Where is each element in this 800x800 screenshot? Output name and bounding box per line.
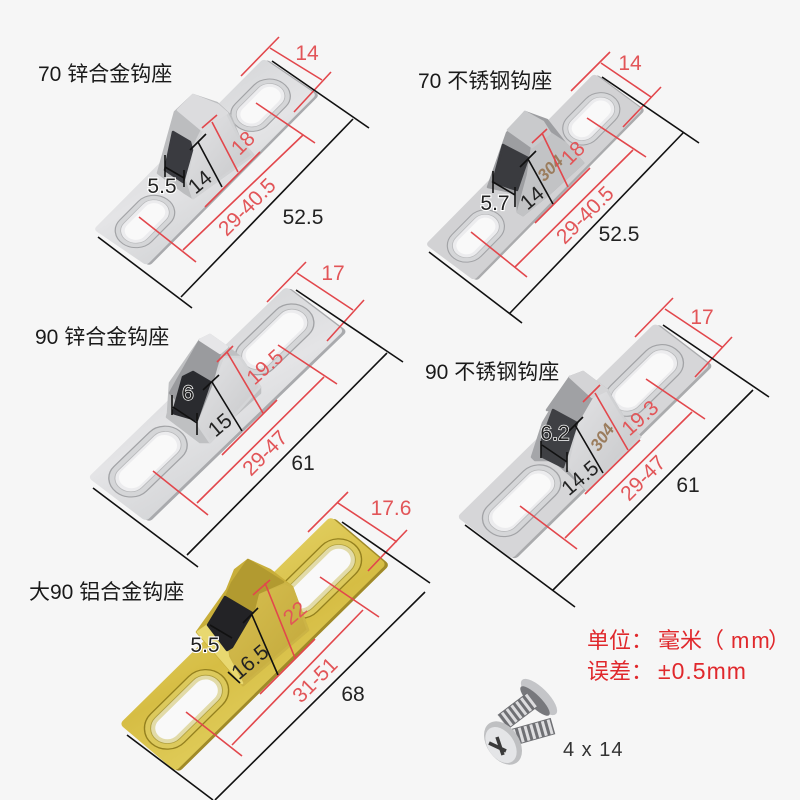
unit note: ） xyxy=(768,628,790,653)
panel: large 90 aluminium alloy hook seat xyxy=(29,492,430,800)
dimension: depth 14 xyxy=(184,134,222,199)
unit note: 单位： xyxy=(587,628,653,653)
dimension: gap 6 xyxy=(172,382,197,435)
dimension: hole spacing 29-47 xyxy=(153,345,337,515)
metal plate xyxy=(457,322,713,561)
dimension: gap 5.5: 5.5 xyxy=(190,634,220,657)
dimension: width 14 xyxy=(241,37,331,112)
dimension: gap 5.5 xyxy=(147,155,184,198)
screw size label: 4 x 14 xyxy=(563,739,623,761)
gold plate xyxy=(120,515,390,773)
dimension: length 52.5 xyxy=(429,77,699,323)
title: large 90 aluminium: 大90 铝合金钩座 xyxy=(29,581,184,604)
unit note xyxy=(587,628,790,684)
dimension: gap 6.2 xyxy=(540,422,570,472)
dimension: height 19.3 xyxy=(583,385,663,494)
hook block xyxy=(532,372,640,490)
dimension: length 61 xyxy=(93,290,403,567)
dimension: height 18: 18 xyxy=(557,137,590,170)
dimension: width 17: 17 xyxy=(690,306,714,329)
dimension: depth 15 xyxy=(203,375,242,442)
hook block xyxy=(197,560,308,685)
dimension: gap 6: 6 xyxy=(182,382,194,405)
dimension: depth 16.5: 16.5 xyxy=(227,640,273,684)
dimension: depth 16.5 xyxy=(227,608,278,684)
dimension: length 61: 61 xyxy=(291,452,315,475)
unit note: mm xyxy=(731,628,772,653)
dimension: height 22: 22 xyxy=(279,597,312,630)
dimension: hole spacing 31-51: 31-51 xyxy=(288,653,342,707)
dimension: width 17 xyxy=(267,262,364,341)
icon: screws xyxy=(476,674,562,772)
dimension: hole spacing 29-40.5: 29-40.5 xyxy=(552,182,619,249)
dimension: depth 14: 14 xyxy=(516,182,549,215)
hook block xyxy=(488,112,583,215)
dimension: length 52.5 xyxy=(98,61,369,308)
dimension: length 68 xyxy=(127,522,430,800)
metal plate xyxy=(426,73,645,282)
dimension: height 18: 18 xyxy=(227,127,260,160)
dimension: gap 5.7: 5.7 xyxy=(480,192,510,215)
panel: 70 stainless hook seat xyxy=(418,52,699,323)
metal plate xyxy=(94,58,319,267)
hook block xyxy=(167,335,260,442)
panel: 90 zinc alloy hook seat xyxy=(35,262,403,567)
dimension: height 19.5: 19.5 xyxy=(242,345,288,390)
dimension: width 14 xyxy=(571,52,661,127)
dimension: length 52.5: 52.5 xyxy=(599,223,639,246)
title: 90 stainless: 90 不锈钢钩座 xyxy=(425,361,559,384)
dimension: length 52.5: 52.5 xyxy=(283,206,323,229)
dimension: height 22 xyxy=(253,580,315,694)
dimension: gap 5.5: 5.5 xyxy=(147,175,177,198)
dimension: width 17.6: 17.6 xyxy=(371,497,411,520)
dimension: height 18 xyxy=(202,115,260,207)
dimension: width 14: 14 xyxy=(618,52,642,75)
hook block xyxy=(158,95,253,198)
title: 70 zinc: 70 锌合金钩座 xyxy=(38,63,172,86)
unit note: （ xyxy=(702,628,724,653)
dimension: depth 14: 14 xyxy=(184,166,217,199)
dimension: depth 15: 15 xyxy=(204,409,237,442)
dimension: width 17 xyxy=(635,298,732,377)
dimension: gap 5.7 xyxy=(480,171,515,215)
dimension: height 19.3: 19.3 xyxy=(617,396,663,441)
panel: 90 stainless hook seat xyxy=(425,298,769,607)
dimension: length 68: 68 xyxy=(341,683,365,706)
dimension: depth 14 xyxy=(516,151,553,215)
dimension: hole spacing 29-40.5: 29-40.5 xyxy=(214,174,281,241)
dimension: hole spacing 29-40.5 xyxy=(139,103,315,262)
dimension: hole spacing 29-47 xyxy=(520,379,705,549)
dimension: depth 14.5 xyxy=(557,417,603,500)
unit note: 误差： xyxy=(587,659,653,684)
dimension: hole spacing 31-51 xyxy=(186,577,379,756)
dimension: gap 5.5 xyxy=(190,625,232,657)
dimension: width 17.6 xyxy=(308,492,411,571)
dimension: depth 14.5: 14.5 xyxy=(557,456,603,500)
dimension: hole spacing 29-47: 29-47 xyxy=(238,426,292,480)
panel: 70 zinc alloy hook seat xyxy=(38,37,369,308)
dimension: length 61: 61 xyxy=(676,474,700,497)
unit note: 毫米 xyxy=(658,628,702,653)
dimension: length 61 xyxy=(465,325,769,607)
dimension: height 19.5 xyxy=(217,345,288,455)
dimension: hole spacing 29-40.5 xyxy=(471,118,646,277)
dimension: width 17: 17 xyxy=(321,262,345,285)
title: 90 zinc: 90 锌合金钩座 xyxy=(35,326,169,349)
unit note: ±0.5mm xyxy=(658,658,747,684)
dimension: gap 6.2: 6.2 xyxy=(540,422,570,445)
dimension: height 18 xyxy=(532,129,590,223)
engraved mark 304: 304 xyxy=(586,420,619,454)
engraved mark 304: 304 xyxy=(534,151,567,185)
title: 70 stainless: 70 不锈钢钩座 xyxy=(418,70,552,93)
dimension: hole spacing 29-47: 29-47 xyxy=(616,451,670,505)
metal plate xyxy=(88,286,347,523)
dimension: width 14: 14 xyxy=(295,42,319,65)
